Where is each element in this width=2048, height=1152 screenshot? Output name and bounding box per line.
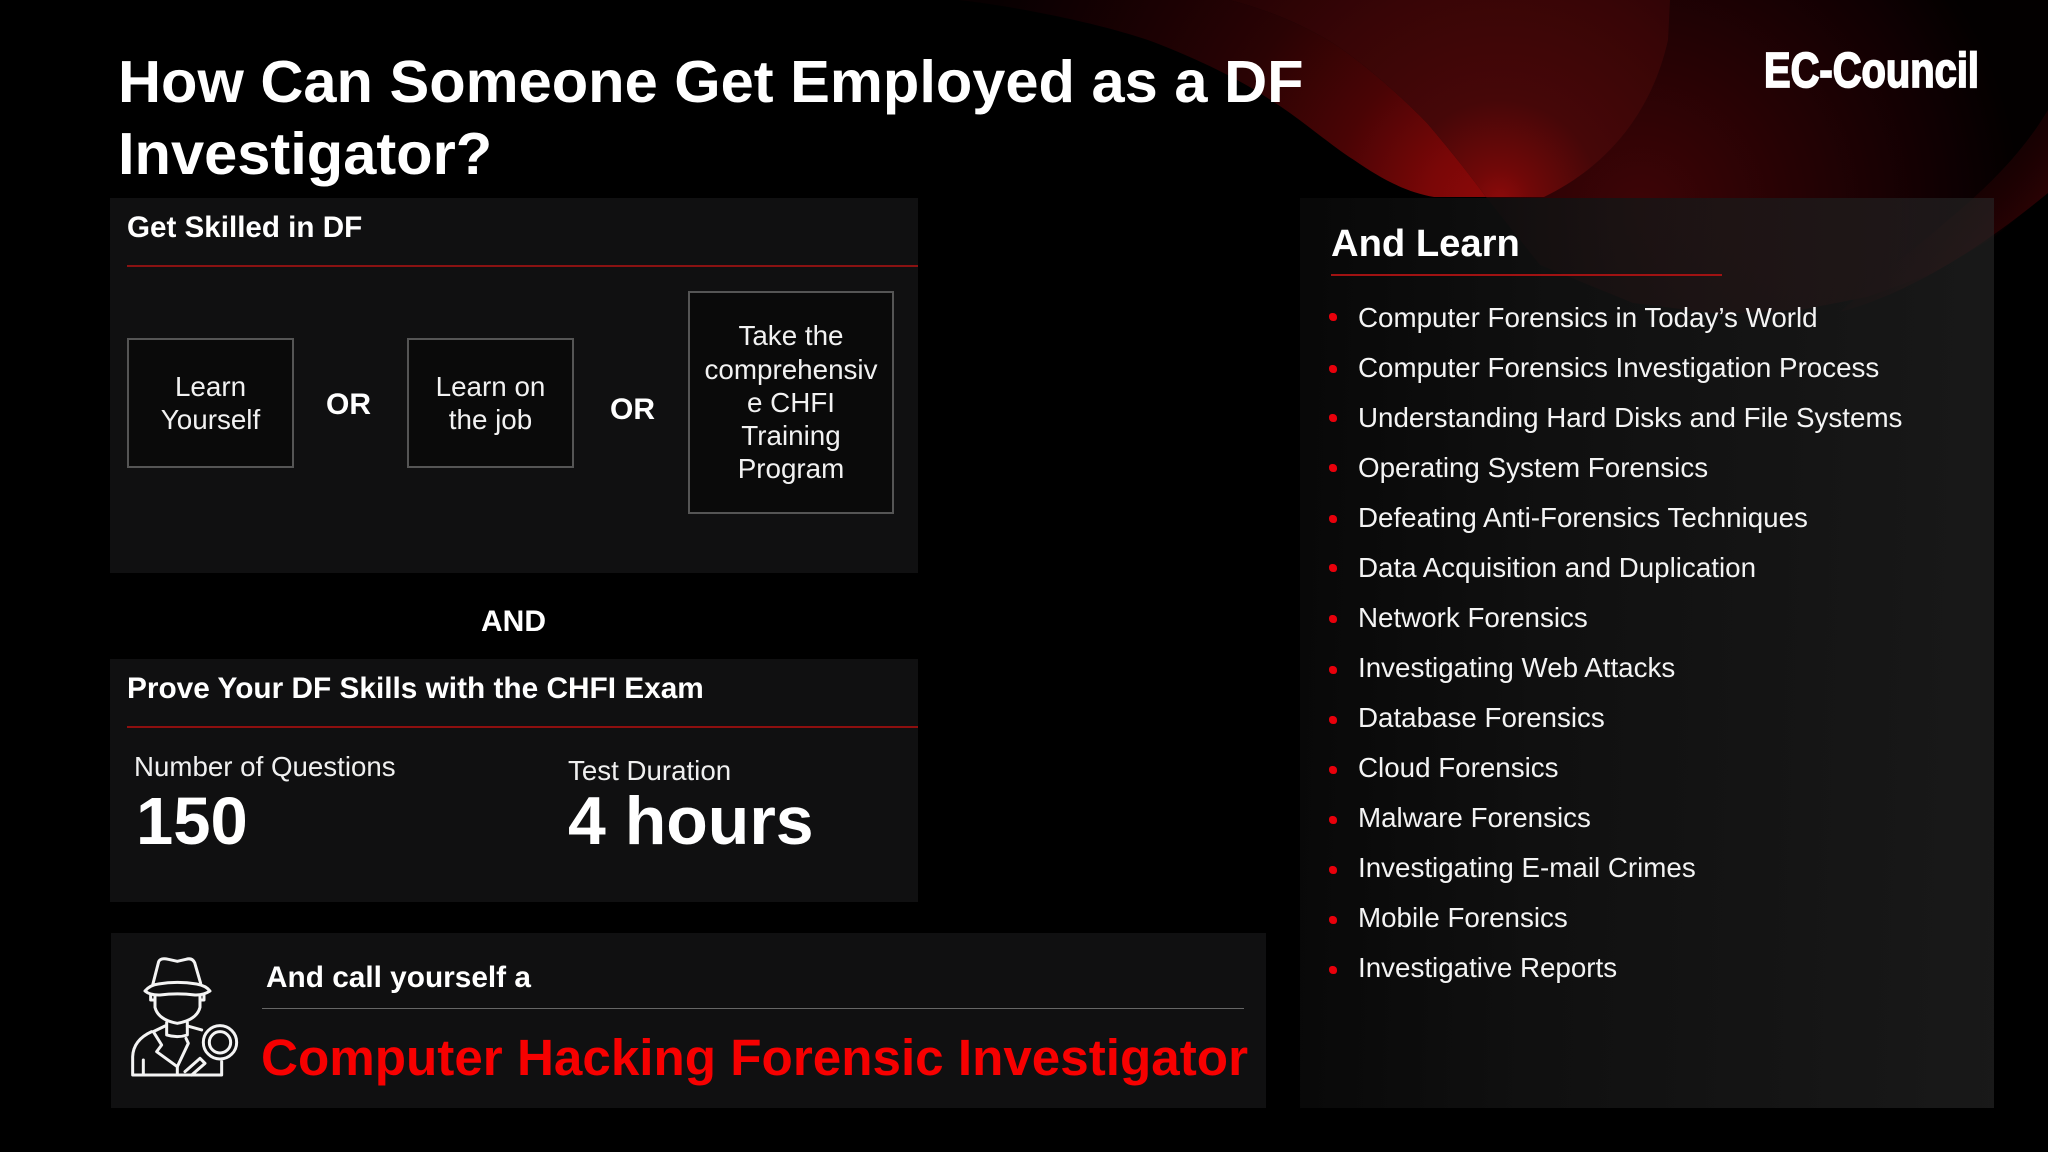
OR label 1: OR	[326, 388, 371, 421]
stat: test duration: Test Duration	[568, 755, 731, 786]
panel: get skilled in DF	[110, 198, 918, 573]
option box: learn yourself: Yourself	[161, 404, 260, 435]
text: and call yourself a: And call yourself a	[266, 961, 531, 994]
topic list: Cloud Forensics	[1358, 752, 1558, 783]
option box: learn yourself	[127, 338, 294, 468]
topic list: Investigative Reports	[1358, 952, 1617, 983]
topic list: Defeating Anti-Forensics Techniques	[1358, 502, 1808, 533]
option box: CHFI training: comprehensiv	[704, 354, 878, 385]
heading: and learn: And Learn	[1331, 222, 1520, 265]
topic list: Operating System Forensics	[1358, 452, 1708, 483]
title: How Can Someone Get Employed as a DF	[118, 48, 1304, 115]
option box: learn on the job	[407, 338, 574, 468]
option box: CHFI training: Training	[741, 420, 841, 451]
AND label: AND	[481, 605, 546, 638]
topic list: Mobile Forensics	[1358, 902, 1568, 933]
text: computer hacking forensic investigator: Computer Hacking Forensic Investigator	[261, 1029, 1248, 1086]
panel: and learn	[1300, 198, 1994, 1108]
topic list: Investigating Web Attacks	[1358, 652, 1675, 683]
stat: number of questions: 150	[136, 784, 248, 859]
option box: CHFI training: Take the	[738, 320, 844, 351]
topic list: Data Acquisition and Duplication	[1358, 552, 1756, 583]
heading: get skilled: Get Skilled in DF	[127, 211, 362, 244]
topic list: Computer Forensics in Today’s World	[1358, 302, 1818, 333]
topic list: Network Forensics	[1358, 602, 1588, 633]
topic list: Database Forensics	[1358, 702, 1605, 733]
stat: number of questions: Number of Questions	[134, 751, 396, 782]
title	[118, 48, 1304, 187]
panel: prove your DF skills	[110, 659, 918, 902]
stat: test duration: 4 hours	[568, 783, 814, 859]
option box: learn on the job: the job	[449, 404, 532, 435]
topic list: Malware Forensics	[1358, 802, 1591, 833]
option box: CHFI training: e CHFI	[747, 387, 835, 418]
option box: learn on the job: Learn on	[436, 371, 545, 402]
option box: learn yourself: Learn	[175, 371, 246, 402]
topic list: Computer Forensics Investigation Process	[1358, 352, 1879, 383]
title: Investigator?	[118, 120, 492, 187]
panel: and call yourself	[111, 933, 1266, 1108]
topic list	[1329, 302, 1902, 983]
OR label 2: OR	[610, 393, 655, 426]
topic list: Investigating E-mail Crimes	[1358, 852, 1696, 883]
heading: prove skills: Prove Your DF Skills with the CHFI Exam	[127, 672, 704, 705]
stat: number of questions	[134, 751, 396, 859]
icon: detective with magnifier	[131, 957, 238, 1077]
option box: CHFI training	[688, 291, 894, 514]
topic list: Understanding Hard Disks and File Systems	[1358, 402, 1902, 433]
option box: CHFI training: Program	[738, 453, 844, 484]
